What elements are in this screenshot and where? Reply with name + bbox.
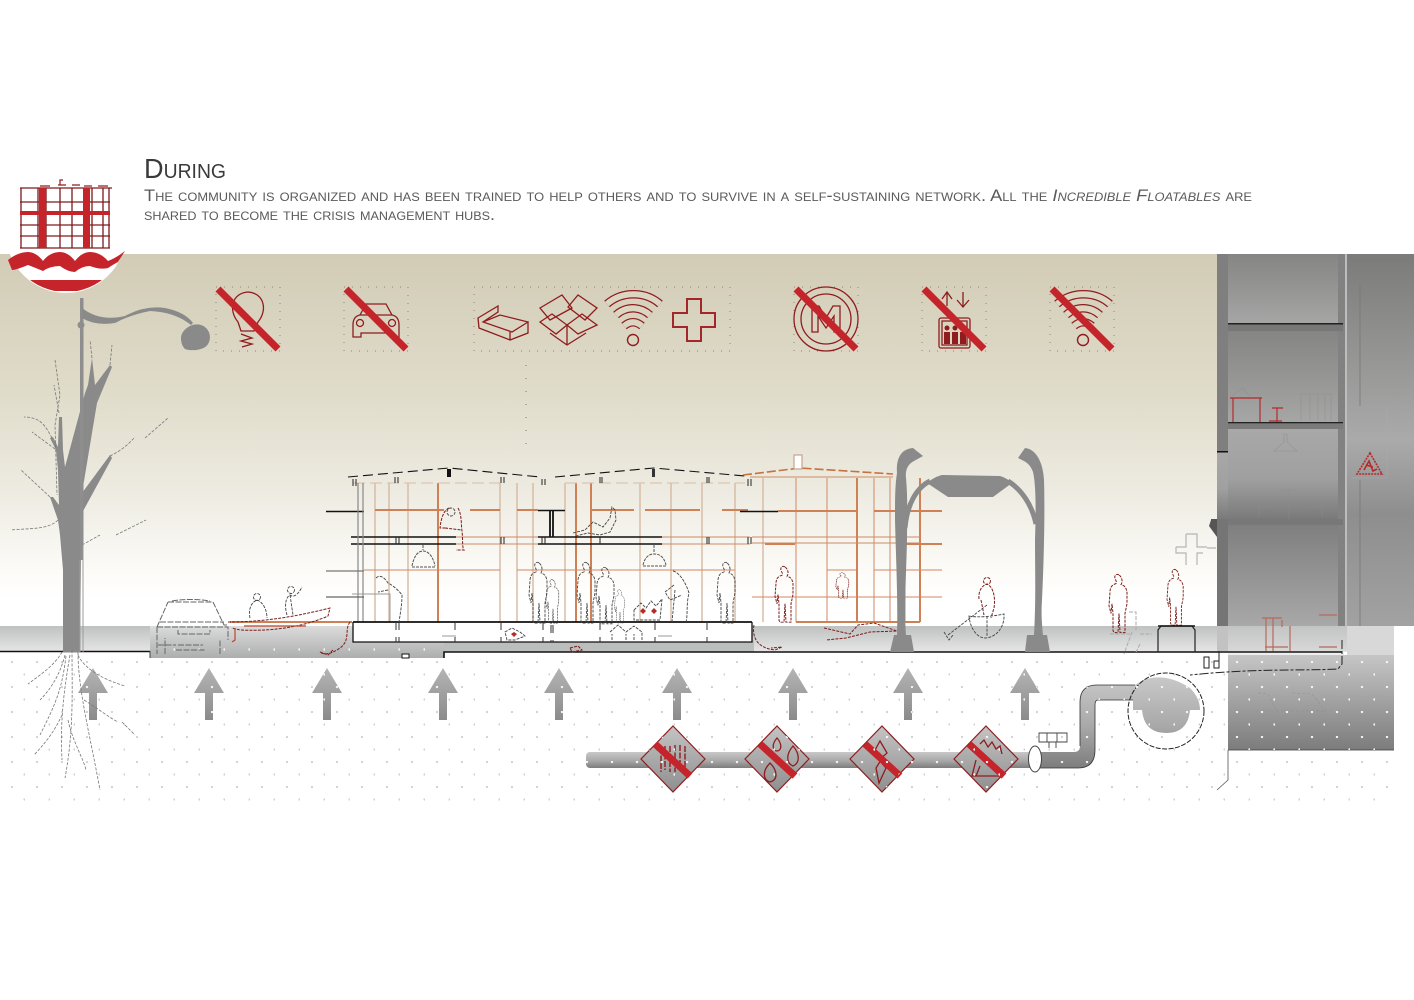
rowing boat with two people [228, 586, 330, 642]
rower outside [944, 578, 1004, 640]
people on the pavement [1109, 569, 1195, 652]
arch [905, 481, 1036, 528]
ghost cross and star [1110, 534, 1216, 654]
people inside the building [376, 507, 849, 652]
dotted vertical mark [525, 365, 527, 450]
icon group: available resources [474, 287, 730, 351]
warning triangle sign [1351, 406, 1387, 478]
right post [1018, 448, 1050, 652]
icon: no metro [794, 287, 858, 351]
icon: medical cross [673, 299, 715, 341]
water level band [0, 626, 1394, 658]
lantern [927, 475, 1012, 497]
diamond: no electricity [850, 726, 914, 792]
flood-proof building section [230, 455, 942, 658]
icon: no lift [922, 287, 986, 351]
hanging lamps [412, 545, 666, 567]
left post [890, 448, 923, 652]
top icon row [216, 287, 1114, 351]
sky background [0, 254, 1218, 626]
diamond: no water [745, 726, 809, 792]
foundation block [1217, 626, 1394, 790]
car [157, 600, 228, 654]
diamond: no heating [641, 726, 705, 792]
icon: box [540, 295, 597, 345]
dots over grey shapes [86, 648, 1388, 788]
neighbouring building section [1209, 254, 1414, 750]
black structure [326, 477, 778, 658]
diamond: no gas [954, 726, 1018, 792]
up arrows: groundwater rising [78, 668, 1040, 720]
tree roots [28, 650, 135, 790]
description text [144, 186, 1252, 224]
furniture in neighbouring building [1230, 388, 1337, 651]
description text: shared to become the crisis management hubs. [144, 205, 495, 224]
tree [11, 340, 168, 652]
icon: wifi [607, 294, 660, 346]
blocked services diamonds [641, 726, 1018, 792]
metro arch entrance [890, 448, 1050, 652]
submerged debris [320, 622, 897, 655]
service pipe and tank [586, 673, 1204, 772]
icon: no wifi [1050, 287, 1114, 351]
description text: The community is organized and has been trained to help others and to survive in a self-sustaining network. All the Incredible Floatables are [144, 186, 1252, 205]
icon: no car [344, 287, 408, 351]
icon: folding bed [478, 306, 528, 340]
facade orange grid [230, 477, 942, 622]
icon: no electricity [216, 287, 280, 351]
ground line [0, 640, 1343, 675]
street lamp [78, 298, 210, 652]
logo: floating building badge [5, 173, 127, 293]
roof [348, 455, 893, 483]
soil dotted ground [0, 652, 1394, 805]
title: During [144, 153, 226, 184]
